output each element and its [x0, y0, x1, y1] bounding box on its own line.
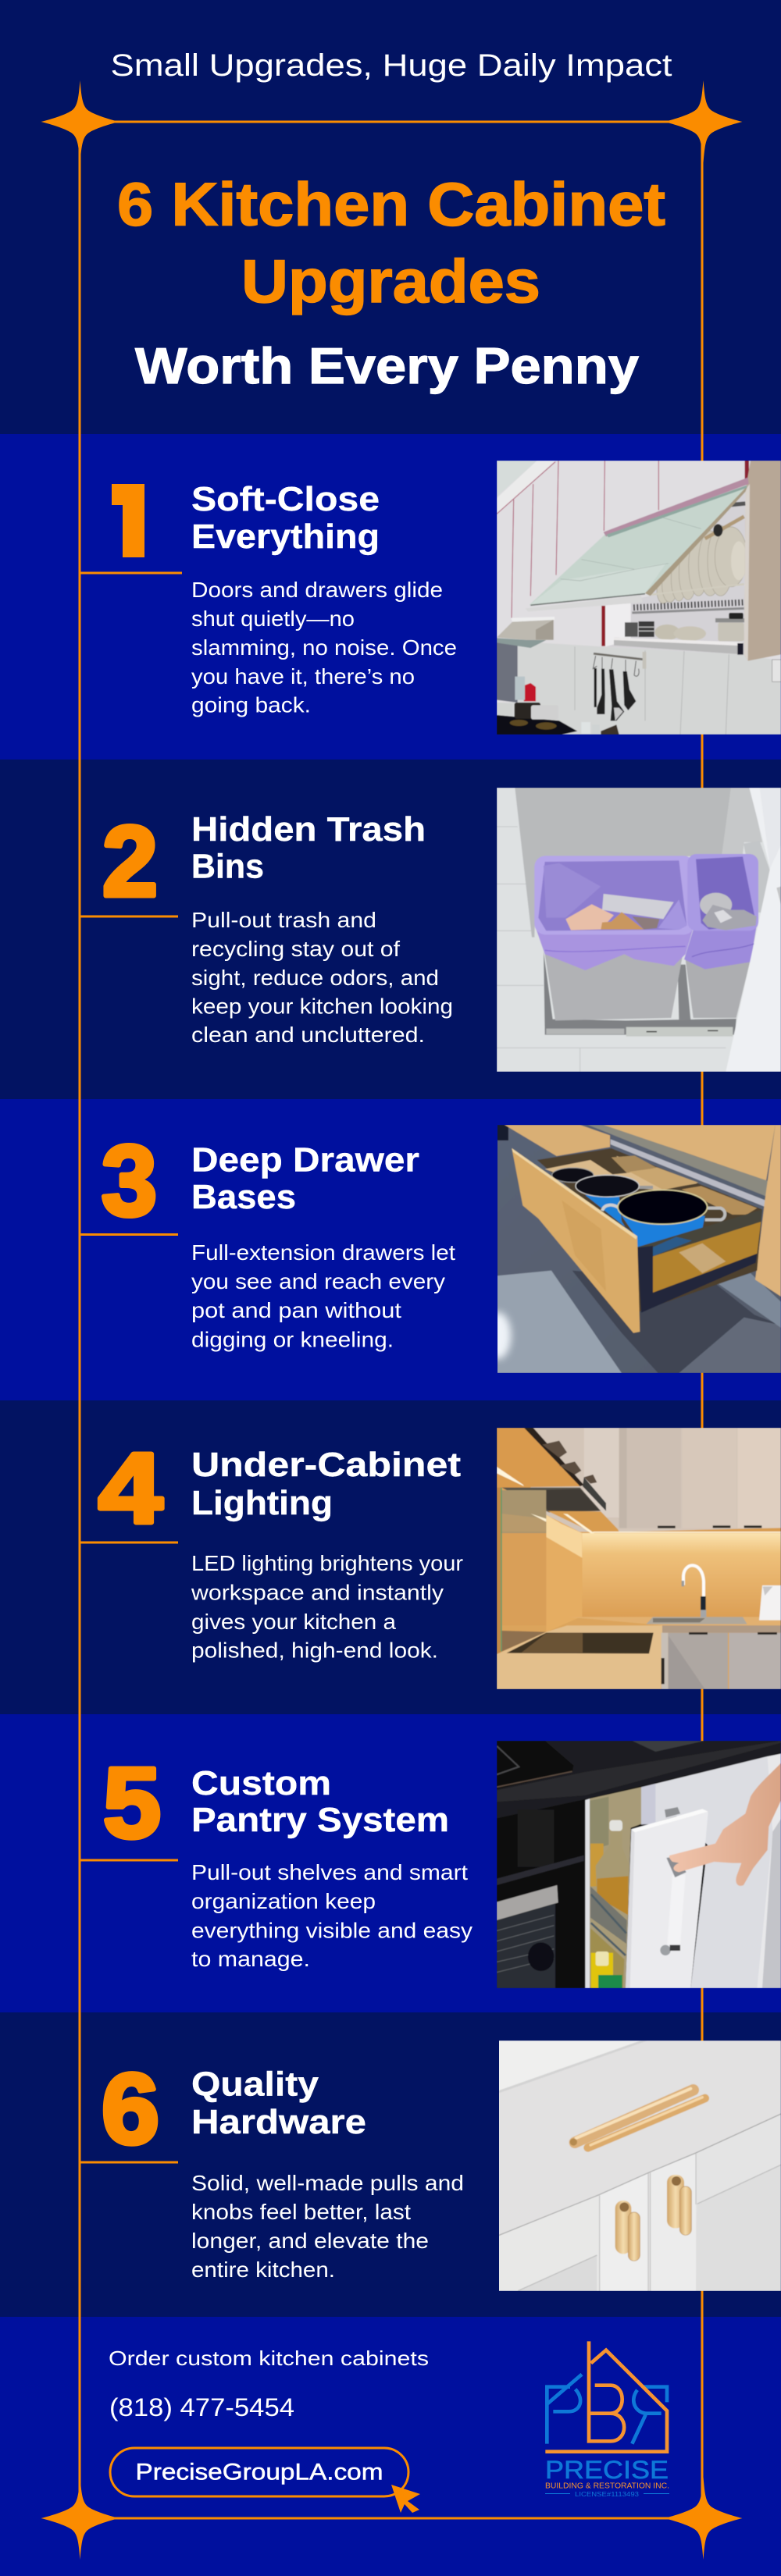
panel: 3 deep drawer bases	[0, 1099, 781, 1400]
body text	[191, 908, 453, 1047]
number 4: 4	[98, 1433, 162, 1544]
icon: cursor arrow	[391, 2485, 420, 2513]
main title	[117, 170, 665, 315]
photo: under-cabinet lit kitchen	[497, 1428, 781, 1689]
body text: longer, and elevate the	[191, 2229, 429, 2253]
body text: you see and reach every	[191, 1269, 445, 1293]
body text: knobs feel better, last	[191, 2200, 411, 2224]
heading: Pantry System	[191, 1801, 449, 1839]
website button	[110, 2448, 408, 2496]
body text: Solid, well-made pulls and	[191, 2171, 464, 2195]
photo: pull-out trash bins	[497, 788, 781, 1072]
body text: you have it, there’s no	[191, 664, 415, 688]
panel: 4 under-cabinet lighting	[0, 1400, 781, 1714]
number 1: 1	[98, 465, 169, 577]
body text: polished, high-end look.	[191, 1638, 438, 1663]
body text: slamming, no noise. Once	[191, 635, 457, 660]
panel: 2 hidden trash bins	[0, 760, 781, 1099]
number underline	[80, 1233, 178, 1236]
panel: 5 custom pantry system	[0, 1714, 781, 2012]
body text: clean and uncluttered.	[191, 1023, 425, 1047]
heading	[191, 810, 426, 885]
heading	[191, 480, 380, 556]
number underline	[80, 2161, 178, 2164]
heading: Under-Cabinet	[191, 1446, 461, 1484]
panel: footer contact	[0, 2317, 781, 2576]
main title: Upgrades	[241, 247, 540, 315]
body text: Full-extension drawers let	[191, 1240, 455, 1265]
call to action text: Order custom kitchen cabinets	[109, 2347, 429, 2370]
number underline	[80, 1541, 178, 1544]
heading: Lighting	[191, 1484, 333, 1522]
body text: keep your kitchen looking	[191, 994, 453, 1018]
number underline	[80, 915, 178, 918]
number underline	[80, 571, 182, 575]
heading	[191, 1446, 461, 1522]
body text	[191, 1551, 463, 1663]
logo mark	[545, 2341, 669, 2453]
body text: workspace and instantly	[191, 1580, 444, 1605]
body text: going back.	[191, 693, 311, 717]
heading: Hidden Trash	[191, 810, 426, 849]
body text: digging or kneeling.	[191, 1327, 394, 1352]
heading: Bins	[191, 848, 264, 885]
heading	[191, 1764, 449, 1839]
body text: Doors and drawers glide	[191, 578, 443, 602]
title block	[111, 48, 672, 394]
body text: pot and pan without	[191, 1298, 401, 1322]
logo name: PRECISE	[545, 2456, 669, 2484]
body text: entire kitchen.	[191, 2258, 335, 2282]
logo tagline: BUILDING & RESTORATION INC.	[545, 2481, 669, 2490]
number 1	[112, 484, 144, 557]
body text: everything visible and easy	[191, 1919, 473, 1942]
subtitle: Small Upgrades, Huge Daily Impact	[111, 48, 672, 83]
heading: Bases	[191, 1178, 296, 1216]
body text: shut quietly—no	[191, 607, 355, 631]
heading: Quality	[191, 2065, 319, 2103]
heading: Deep Drawer	[191, 1141, 419, 1179]
photo: gold cabinet pulls	[499, 2041, 781, 2291]
body text: Pull-out shelves and smart	[191, 1860, 468, 1884]
body text: gives your kitchen a	[191, 1610, 396, 1634]
number 6: 6	[102, 2053, 159, 2165]
logo license: LICENSE#1113493	[575, 2491, 640, 2498]
number 3: 3	[102, 1126, 157, 1236]
company logo	[545, 2341, 669, 2498]
website button: PreciseGroupLA.com	[136, 2459, 383, 2485]
body text: recycling stay out of	[191, 937, 400, 961]
title second line: Worth Every Penny	[135, 337, 639, 394]
heading: Everything	[191, 518, 380, 556]
heading: Soft-Close	[191, 480, 380, 518]
body text: sight, reduce odors, and	[191, 966, 439, 990]
photo: pull-out pantry door	[497, 1741, 781, 1988]
heading: Custom	[191, 1764, 331, 1802]
number underline	[80, 1859, 178, 1861]
body text: LED lighting brightens your	[191, 1551, 463, 1575]
heading	[191, 2065, 366, 2141]
phone number: (818) 477-5454	[109, 2393, 294, 2421]
number 5: 5	[103, 1747, 161, 1859]
body text	[191, 1240, 455, 1352]
body text: to manage.	[191, 1947, 310, 1971]
panel: 6 quality hardware	[0, 2012, 781, 2317]
heading: Hardware	[191, 2103, 366, 2141]
photo: lift-up cabinet door	[497, 461, 781, 735]
body text: organization keep	[191, 1889, 376, 1913]
body text	[191, 578, 457, 717]
number 2: 2	[102, 806, 158, 918]
body text: Pull-out trash and	[191, 908, 376, 932]
photo: deep drawer with pots	[497, 1125, 781, 1373]
main title: 6 Kitchen Cabinet	[117, 170, 665, 239]
body text	[191, 1860, 473, 1971]
heading	[191, 1141, 419, 1216]
panel: 1 soft-close everything	[81, 461, 781, 735]
body text	[191, 2171, 464, 2282]
